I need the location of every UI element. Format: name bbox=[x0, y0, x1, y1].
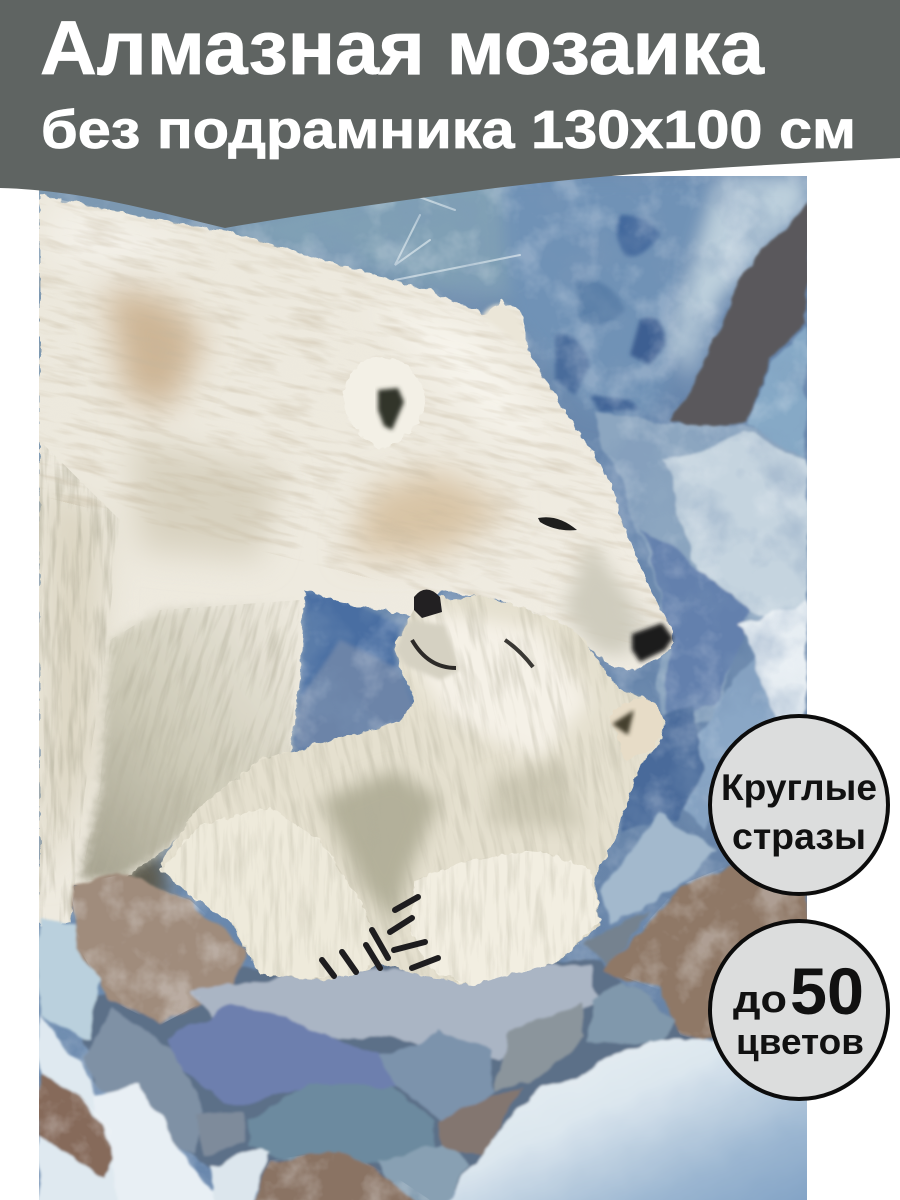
muzzle shade bbox=[565, 540, 630, 650]
illustration: polar bear mother and cub bbox=[39, 176, 807, 1200]
badge: up to 50 colours bbox=[710, 921, 888, 1099]
badge: up to 50 colours: цветов bbox=[736, 1021, 864, 1062]
header banner bbox=[0, 0, 900, 228]
right paw bbox=[410, 850, 600, 985]
nose bbox=[414, 590, 442, 618]
background: blue ice bbox=[39, 176, 807, 1200]
eye bbox=[538, 517, 577, 530]
mother bear bbox=[39, 194, 676, 926]
badge: round rhinestones: Круглые bbox=[721, 767, 877, 808]
eye bbox=[505, 640, 533, 667]
ice: right blocks bbox=[590, 325, 807, 830]
fur texture bbox=[39, 202, 668, 625]
ear bbox=[610, 698, 663, 760]
claws bbox=[322, 897, 438, 976]
badge: up to 50 colours: 50 bbox=[790, 954, 864, 1028]
badge: round rhinestones bbox=[710, 716, 888, 894]
front leg shaded bbox=[80, 600, 300, 880]
rock: dark slab upper right bbox=[672, 205, 807, 428]
muzzle bbox=[395, 620, 460, 680]
body and head bbox=[39, 195, 672, 925]
mouth bbox=[412, 640, 456, 668]
rocks: behind cub in gap bbox=[292, 590, 400, 752]
title line 1: Алмазная мозаика bbox=[40, 6, 765, 91]
left paw bbox=[160, 808, 385, 978]
cub bear bbox=[159, 590, 666, 986]
bottom rocks bbox=[39, 815, 815, 1200]
near ear bbox=[344, 357, 424, 448]
shadow under bears bbox=[128, 850, 178, 894]
badge: round rhinestones: стразы bbox=[732, 816, 866, 857]
vertical fur on chest strip bbox=[39, 446, 118, 924]
nose bbox=[632, 623, 673, 662]
title bbox=[40, 6, 856, 160]
body shading bbox=[186, 595, 665, 982]
badge: up to 50 colours: до bbox=[733, 979, 787, 1021]
overlay: rock mottling bbox=[39, 860, 807, 1200]
shoulder shading tan bbox=[39, 195, 668, 867]
body bbox=[160, 590, 665, 985]
far ear bbox=[482, 305, 526, 348]
title line 2: без подрамника 130х100 см bbox=[41, 100, 856, 160]
paw fur texture bbox=[160, 821, 592, 984]
leg fur texture bbox=[86, 600, 300, 880]
overlay: watercolor mottling bbox=[39, 176, 807, 1200]
